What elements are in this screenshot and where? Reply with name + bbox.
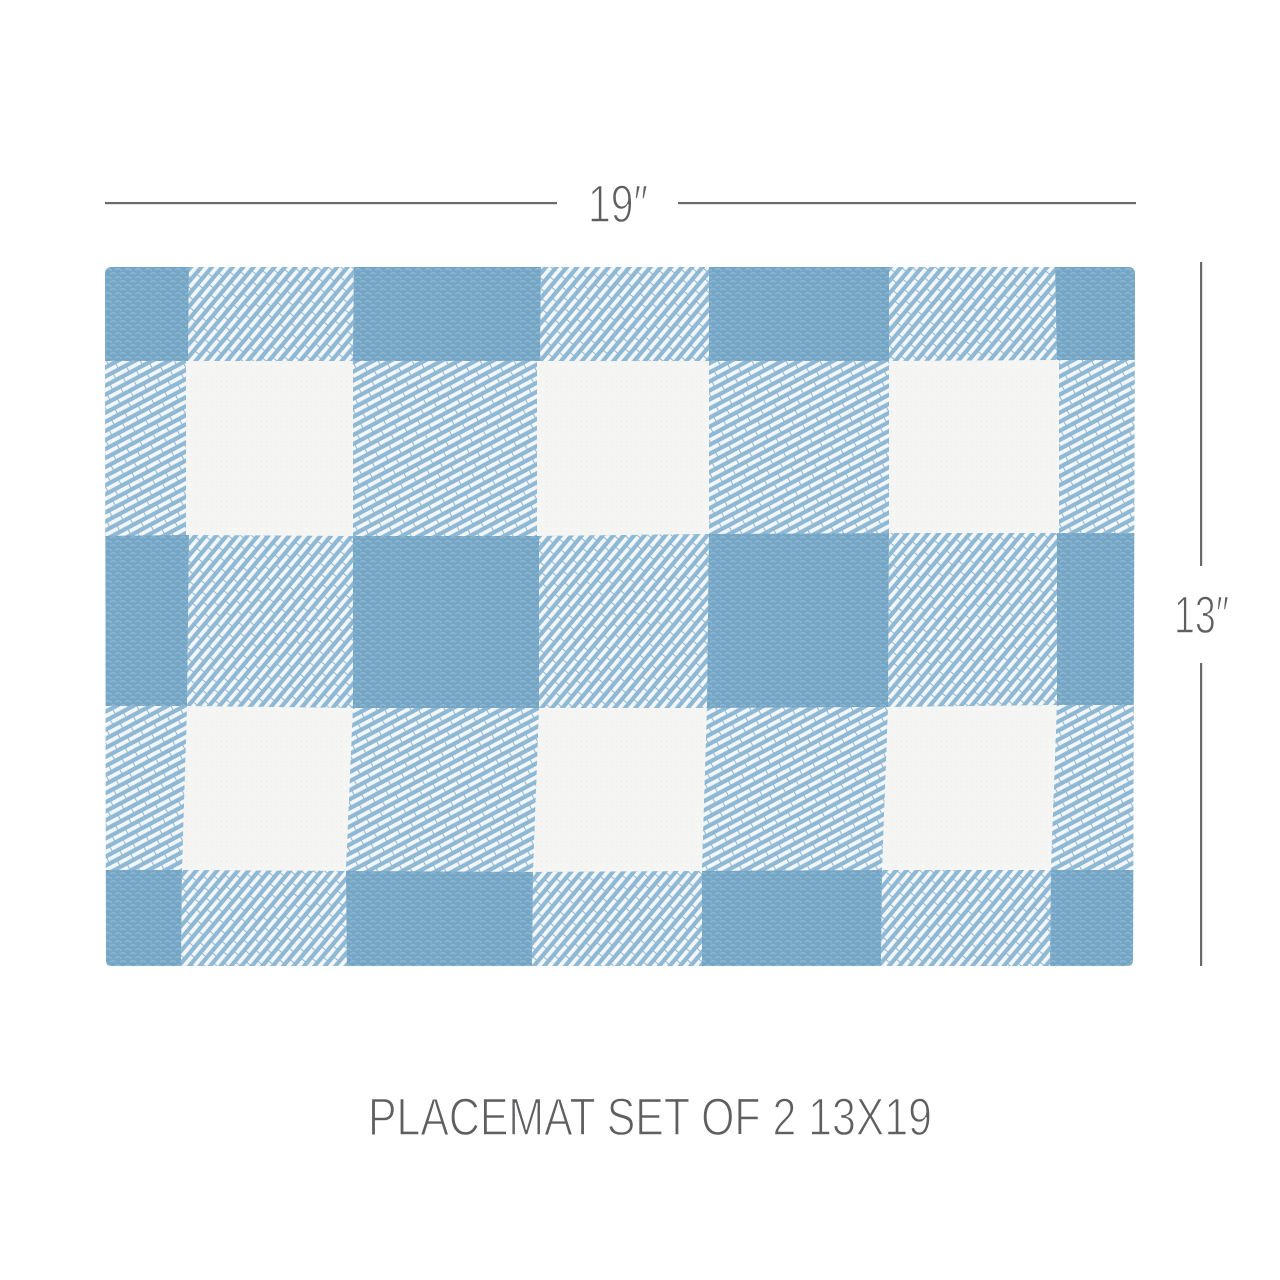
fourth row of check squares (100, 705, 1140, 872)
placemat: buffalo check fabric (100, 260, 1140, 970)
bottom row of check squares (100, 870, 1140, 970)
third row of check squares (100, 533, 1140, 708)
product caption: PLACEMAT SET OF 2 13X19 (368, 1088, 932, 1147)
height label: 13 inches: 13″ (1174, 586, 1229, 645)
width dimension line (105, 202, 1136, 204)
width label: 19 inches: 19″ (588, 175, 648, 234)
top row of check squares (100, 262, 1140, 361)
height dimension line (1200, 262, 1202, 966)
second row of check squares (100, 360, 1140, 536)
